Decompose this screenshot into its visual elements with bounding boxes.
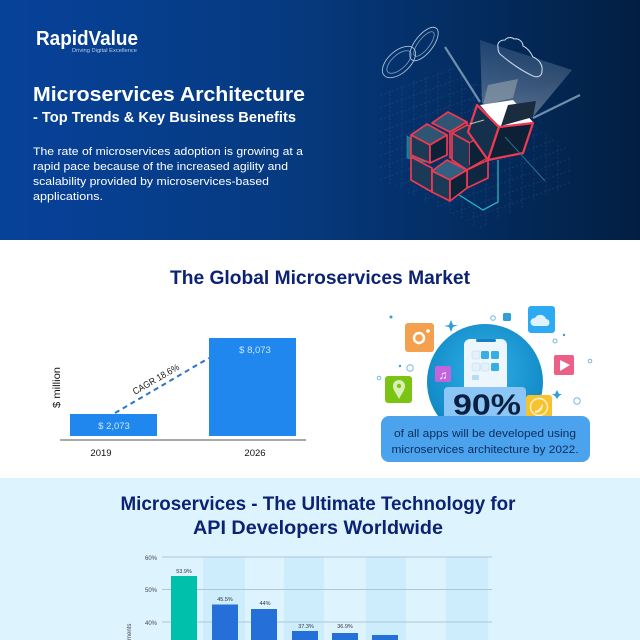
badge: 90%: 90% [453, 390, 521, 422]
trend arrow [115, 358, 209, 413]
icon: music [435, 366, 451, 382]
icon: phone call [526, 395, 552, 421]
y axis title: ments [127, 624, 133, 640]
cube lower right [467, 160, 488, 188]
cube back [432, 112, 467, 132]
illustration: apps [377, 306, 592, 462]
cube lower left [411, 157, 432, 192]
logo: RapidValue: RapidValue [36, 28, 138, 50]
heading: The Global Microservices Market [170, 268, 471, 289]
opened cube [468, 105, 499, 160]
title: Microservices Architecture [33, 84, 305, 106]
intro paragraph: scalability provided by microservices-based [33, 176, 269, 188]
intro paragraph: applications. [33, 191, 103, 203]
axis label: $ million [51, 367, 63, 408]
cube right [452, 125, 488, 170]
y axis ticks [145, 556, 158, 627]
globe [427, 324, 543, 440]
value labels: 45.5% [217, 597, 233, 603]
panel: header [0, 0, 640, 240]
value labels: 37.3% [298, 624, 314, 630]
column bands [203, 557, 488, 640]
value labels [176, 569, 353, 630]
phone [464, 339, 507, 399]
callout text: of all apps will be developed using [394, 428, 576, 440]
bars [171, 576, 197, 640]
badge: 90% [444, 387, 526, 422]
teal connector [456, 160, 498, 210]
light beam [480, 40, 572, 118]
value labels: 44% [259, 601, 271, 607]
icon: camera [405, 323, 434, 352]
icon: map pin [385, 376, 412, 403]
intro paragraph [33, 146, 304, 203]
icon: play [554, 355, 574, 375]
bar 2019: $ 2,073 [98, 421, 130, 432]
icon: music: ♫ [438, 368, 448, 382]
x labels: 2019 [90, 448, 112, 459]
value labels: 53.9% [176, 569, 192, 575]
decorative sparkles [377, 316, 592, 404]
bar 2026: $ 8,073 [239, 345, 271, 356]
intro paragraph: rapid pace because of the increased agility and [33, 161, 288, 173]
intro paragraph: The rate of microservices adoption is growing at a [33, 146, 304, 158]
bar chart: adoption [127, 556, 492, 640]
bar 2019 [70, 414, 157, 436]
panel: global market [0, 240, 640, 478]
subtitle: - Top Trends & Key Business Benefits [33, 110, 296, 126]
value labels: 36.9% [337, 624, 353, 630]
cube left [411, 124, 447, 145]
callout text: microservices architecture by 2022. [392, 444, 578, 456]
heading [120, 494, 516, 539]
logo: RapidValue: Driving Digital Excellence [72, 48, 137, 54]
icon: cloud [498, 38, 542, 77]
callout text [381, 416, 590, 462]
heading: Microservices - The Ultimate Technology for [120, 494, 516, 515]
bar 2026 [209, 338, 296, 436]
heading: API Developers Worldwide [193, 518, 443, 539]
cube front [432, 160, 467, 180]
bar chart: market size: 2026 [244, 448, 266, 459]
y axis ticks: 60% [145, 556, 158, 562]
icon: cloud [528, 306, 555, 333]
icon: infinity loop [377, 23, 443, 84]
CAGR label: CAGR 18.6% [131, 362, 182, 398]
panel: API developers [0, 478, 640, 640]
bar chart: market size [51, 338, 306, 459]
cube stack [411, 100, 536, 201]
grid floor [380, 65, 570, 228]
y axis ticks: 40% [145, 621, 158, 627]
illustration: cubes and cloud [377, 23, 580, 228]
y axis ticks: 50% [145, 588, 158, 594]
